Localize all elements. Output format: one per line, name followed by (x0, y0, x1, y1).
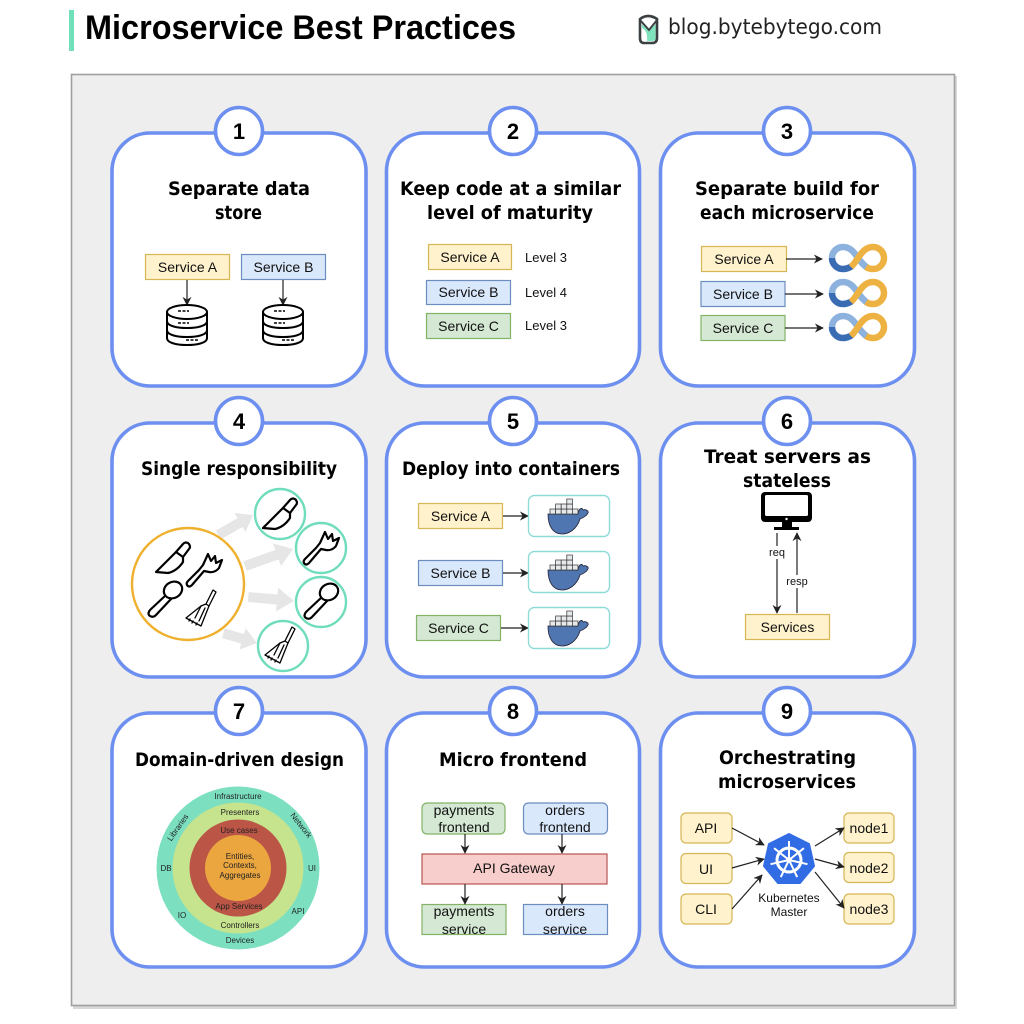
panel: 7 domain-driven design (112, 688, 366, 967)
icon: monitor (761, 492, 812, 530)
containers (528, 496, 610, 648)
panel: 3 separate build (660, 108, 914, 386)
heading: Separate data (168, 178, 310, 200)
node boxes: node1 (850, 820, 889, 836)
heading: level of maturity (427, 202, 594, 224)
arrows (187, 280, 283, 305)
onion diagram: Use cases (220, 826, 258, 835)
heading: Orchestrating (719, 747, 856, 769)
number 3: 3 (781, 119, 793, 144)
service rows (416, 504, 502, 640)
onion diagram: Entities, (226, 852, 254, 861)
onion diagram: Controllers (221, 921, 259, 930)
heading (718, 747, 856, 793)
number 2: 2 (507, 119, 519, 144)
arrows (465, 834, 562, 904)
kubernetes master label (758, 891, 820, 919)
payments frontend (422, 802, 505, 835)
panel: 1 separate data store (112, 108, 366, 386)
service rows: Service C (713, 320, 773, 336)
onion diagram: UI (308, 864, 316, 873)
icon: docker whales (548, 499, 588, 646)
panel: background (72, 74, 957, 1009)
number 1 (216, 108, 262, 154)
level labels (525, 250, 567, 333)
payments service: service (442, 921, 486, 937)
icon: devops loops (832, 247, 884, 338)
onion diagram: Presenters (221, 808, 259, 817)
service rows (426, 244, 512, 338)
number 6: 6 (781, 409, 793, 434)
heading: Domain-driven design (135, 749, 344, 771)
node boxes: node2 (850, 860, 889, 876)
orders service: orders (545, 903, 585, 919)
service rows: Service A (440, 249, 500, 265)
input boxes (681, 813, 732, 924)
panel: 9 orchestrating (660, 688, 914, 967)
onion diagram: Infrastructure (214, 792, 262, 801)
orders service: service (543, 921, 587, 937)
input boxes: API (695, 820, 717, 836)
heading: Deploy into containers (402, 458, 620, 480)
onion diagram: Contexts, (223, 861, 257, 870)
panel: 4 single responsibility (112, 398, 366, 677)
heading: Treat servers as (704, 446, 871, 468)
service rows: Service C (438, 318, 499, 334)
orders frontend: frontend (539, 819, 591, 835)
single-purpose circles (255, 489, 346, 671)
number 8 (490, 688, 536, 734)
brand url: blog.bytebytego.com (668, 15, 882, 40)
node boxes: node3 (850, 901, 889, 917)
number 9 (764, 688, 810, 734)
heading: store (215, 202, 262, 224)
heading (695, 178, 880, 224)
resp arrow (785, 533, 809, 613)
onion diagram: Network (288, 811, 314, 841)
heading (168, 178, 310, 224)
onion diagram: API (292, 907, 304, 916)
icon: logo (640, 16, 657, 43)
all-in-one circle (132, 528, 244, 640)
service rows: Service A (714, 251, 774, 267)
onion diagram: Libraries (165, 812, 190, 843)
number 2 (490, 108, 536, 154)
payments service: payments (434, 903, 494, 919)
orders frontend (524, 802, 608, 835)
heading: Keep code at a similar (400, 178, 622, 200)
number 4 (216, 398, 262, 444)
service A box: Service A (158, 259, 218, 275)
level labels: Level 4 (525, 285, 567, 300)
level labels: Level 3 (525, 318, 567, 333)
input boxes: CLI (695, 901, 717, 917)
heading: Micro frontend (439, 749, 587, 771)
api gateway (422, 854, 607, 884)
services box (746, 614, 830, 640)
number 4: 4 (233, 409, 246, 434)
panel: 2 code maturity (386, 108, 640, 386)
service B box (242, 254, 326, 280)
heading (400, 178, 622, 224)
panel: 6 stateless (660, 398, 914, 677)
kubernetes master label: Kubernetes (758, 891, 820, 905)
panel: 5 containers (386, 398, 640, 677)
number 7: 7 (233, 699, 245, 724)
panel: 8 micro frontend (386, 688, 640, 967)
title accent bar (69, 10, 74, 51)
node boxes (844, 813, 894, 924)
onion diagram: App Services (215, 902, 263, 911)
orders service (524, 903, 608, 937)
level labels: Level 3 (525, 250, 567, 265)
arrows (501, 516, 528, 628)
title: Microservice Best Practices (85, 9, 516, 47)
service rows: Service B (431, 565, 490, 581)
number 7 (216, 688, 262, 734)
number 5 (490, 398, 536, 444)
onion diagram (156, 786, 320, 950)
service rows: Service B (439, 284, 498, 300)
onion diagram: Aggregates (220, 871, 260, 880)
req arrow (767, 533, 787, 613)
api gateway: API Gateway (473, 860, 555, 876)
heading: each microservice (700, 202, 874, 224)
number 9: 9 (781, 699, 793, 724)
service A box (146, 254, 230, 280)
heading: Separate build for (695, 178, 880, 200)
payments frontend: frontend (438, 819, 490, 835)
resp arrow: resp (786, 576, 808, 588)
payments frontend: payments (434, 802, 494, 818)
number 1: 1 (233, 119, 245, 144)
arrows (732, 828, 844, 909)
kubernetes master label: Master (771, 905, 807, 919)
gray arrows (213, 505, 297, 654)
number 8: 8 (507, 699, 519, 724)
heading (704, 446, 871, 492)
icon: databases (167, 305, 303, 345)
service rows: Service A (431, 508, 491, 524)
number 5: 5 (507, 409, 519, 434)
service rows (701, 246, 786, 340)
heading: microservices (718, 771, 856, 793)
number 6 (764, 398, 810, 444)
heading: stateless (743, 470, 831, 492)
services box: Services (761, 619, 814, 635)
input boxes: UI (699, 861, 713, 877)
heading: Single responsibility (141, 458, 338, 480)
onion diagram: DB (160, 864, 172, 873)
icon: kubernetes (764, 834, 814, 883)
number 3 (764, 108, 810, 154)
orders frontend: orders (545, 802, 585, 818)
icons: knife fork spoon broom (263, 498, 341, 663)
onion diagram: IO (178, 911, 186, 920)
arrows (785, 259, 823, 328)
service B box: Service B (254, 259, 313, 275)
onion diagram: Devices (226, 936, 254, 945)
service rows: Service C (428, 620, 489, 636)
req arrow: req (769, 547, 785, 559)
service rows: Service B (713, 286, 773, 302)
payments service (422, 903, 506, 937)
